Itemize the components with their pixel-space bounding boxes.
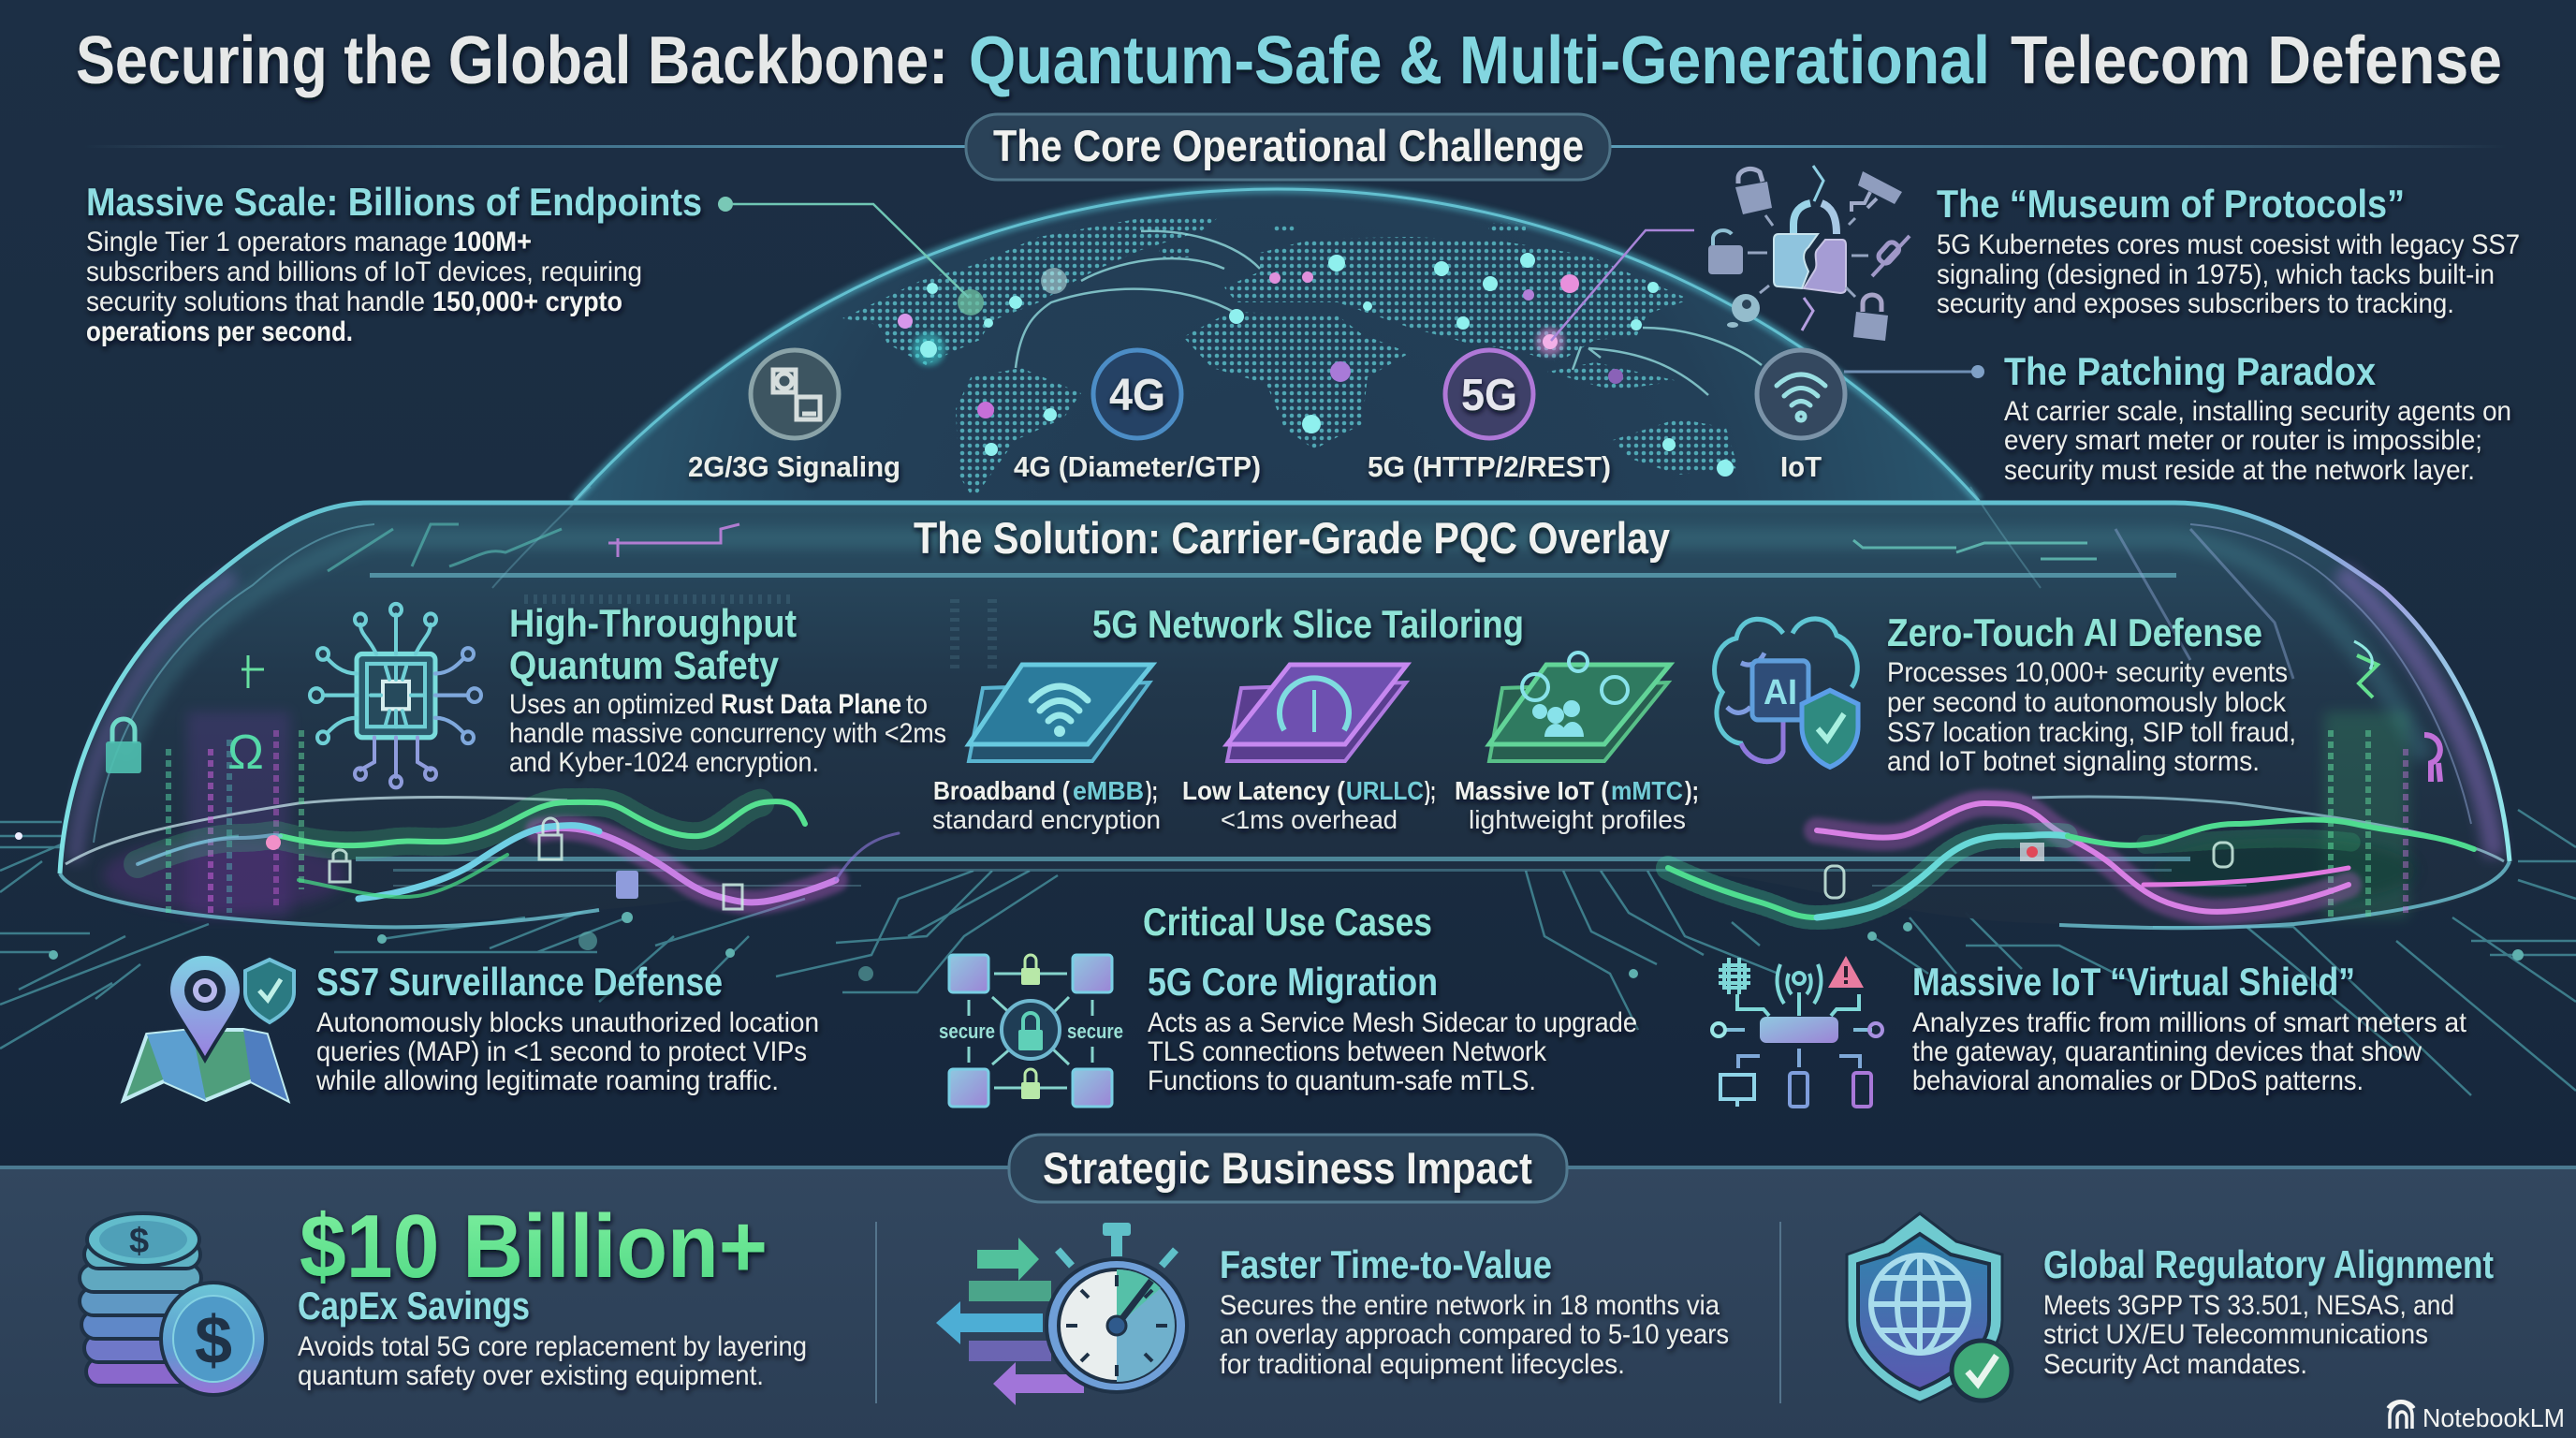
text: Massive Scale: operations per second. <box>86 316 353 347</box>
globe dome with dotted world map <box>562 186 1992 513</box>
slice labels: URLLC <box>1346 776 1424 805</box>
slice labels: <1ms overhead <box>1221 805 1398 834</box>
badge: 4G: 4G <box>1109 371 1165 420</box>
text: Faster Time-to-Value: for traditional equipment lifecycles. <box>1220 1349 1625 1380</box>
text: Massive Scale: Single Tier 1 operators manage <box>86 227 447 257</box>
icon: coin stack: $ <box>129 1222 149 1261</box>
slice labels: eMBB <box>1073 776 1144 805</box>
badge: 5G: 5G <box>1461 371 1517 420</box>
title: Telecom Defense <box>2011 23 2502 98</box>
slice labels: ); <box>1425 776 1436 805</box>
slice labels: mMTC <box>1611 776 1683 805</box>
text: Faster Time-to-Value: Secures the entire network in 18 months via <box>1220 1290 1720 1321</box>
text: Massive Scale: Massive Scale: Billions of Endpoints <box>86 180 702 224</box>
text: Massive IoT Virtual Shield <box>1912 960 2467 1096</box>
slice labels: lightweight profiles <box>1469 805 1686 834</box>
chain <box>1872 236 1910 276</box>
title <box>76 23 2502 98</box>
text: 5G Core Migration: Functions to quantum-safe mTLS. <box>1148 1065 1536 1096</box>
text: Museum of Protocols <box>1937 182 2520 319</box>
icon: AI brain with shield <box>1715 619 1858 767</box>
text: Zero-Touch AI Defense: per second to autonomously block <box>1887 687 2287 718</box>
slice labels: standard encryption <box>932 805 1161 834</box>
text: Global Regulatory Alignment: strict UX/EU Telecommunications <box>2043 1319 2428 1350</box>
glowing map nodes <box>898 253 1734 477</box>
text: The Patching Paradox: every smart meter or router is impossible; <box>2004 425 2482 456</box>
glass code streaks <box>168 730 2406 917</box>
camera <box>1858 171 1902 204</box>
text: Museum of Protocols: security and exposes subscribers to tracking. <box>1937 288 2454 319</box>
heading: 5G Network Slice Tailoring: 5G Network Slice Tailoring <box>1092 602 1524 646</box>
icon: broken locks cluster <box>1708 166 1910 341</box>
text: High-Throughput Quantum Safety: High-Throughput <box>509 601 797 645</box>
text: 5G Core Migration: 5G Core Migration <box>1148 960 1438 1004</box>
badge labels: 2G/3G Signaling <box>688 450 900 483</box>
badge: 5G <box>1445 350 1533 438</box>
text: Massive IoT Virtual Shield: Massive IoT “Virtual Shield” <box>1912 960 2355 1004</box>
badge labels: IoT <box>1780 450 1822 483</box>
small locks on wave <box>329 818 742 909</box>
text: The Patching Paradox: At carrier scale, installing security agents on <box>2004 396 2511 427</box>
glass decorative circuit marks <box>328 524 2293 679</box>
text: Museum of Protocols: The “Museum of Protocols” <box>1937 182 2405 226</box>
metric: $10 Billion+: Avoids total 5G core replacement by layering <box>298 1331 807 1362</box>
text: Zero-Touch AI Defense: Zero-Touch AI Defense <box>1887 610 2262 654</box>
title: Securing the Global Backbone: <box>76 23 948 98</box>
glass glyphs: lock and omega: Ω <box>227 726 264 780</box>
icon: stopwatch with arrows <box>936 1223 1187 1405</box>
circuit trace nodes <box>15 832 2524 981</box>
key <box>1732 294 1760 322</box>
text: High-Throughput Quantum Safety: Quantum Safety <box>509 643 780 687</box>
text: Faster Time-to-Value: an overlay approach compared to 5-10 years <box>1220 1319 1729 1350</box>
icon: coin stack: $ <box>195 1303 232 1378</box>
pill: Strategic Business Impact <box>1009 1135 1567 1202</box>
icon: AI brain with shield: AI <box>1764 672 1797 712</box>
metric: $10 Billion+: CapEx Savings <box>298 1284 530 1328</box>
text: High-Throughput Quantum Safety: Rust Data Plane <box>721 689 901 720</box>
callout: massive scale leader line <box>718 197 969 298</box>
glass glyphs: lock and omega <box>106 641 2440 782</box>
text: SS7 Surveillance Defense: queries (MAP) in <1 second to protect VIPs <box>316 1036 807 1067</box>
text: Massive Scale <box>86 180 702 347</box>
badge: 4G <box>1093 350 1181 438</box>
badge: IoT wifi <box>1757 350 1845 438</box>
text: High-Throughput Quantum Safety: to <box>906 689 928 720</box>
icon: IoT gateway <box>1712 956 1882 1107</box>
pill: Strategic Business Impact: Strategic Business Impact <box>1043 1143 1532 1193</box>
text: 5G Core Migration <box>1148 960 1637 1096</box>
text: Museum of Protocols: signaling (designed in 1975), which tacks built-in <box>1937 259 2495 290</box>
slice labels <box>932 776 1699 834</box>
badge labels <box>688 450 1822 483</box>
text: The Patching Paradox <box>2004 349 2511 486</box>
text: The Patching Paradox: The Patching Paradox <box>2004 349 2377 393</box>
icon: quantum chip <box>310 604 481 787</box>
pill: The Core Operational Challenge: The Core Operational Challenge <box>993 121 1584 170</box>
text: Faster Time-to-Value <box>1220 1242 1729 1380</box>
metric: $10 Billion+ <box>298 1196 807 1391</box>
text: SS7 Surveillance Defense: Autonomously blocks unauthorized location <box>316 1007 819 1038</box>
text: Global Regulatory Alignment: Meets 3GPP TS 33.501, NESAS, and <box>2043 1290 2454 1321</box>
network arcs <box>1016 231 1762 395</box>
circuit traces below the dome <box>0 810 2576 1095</box>
icon: service mesh: secure <box>939 1020 995 1043</box>
slice labels: ); <box>1146 776 1158 805</box>
pill: The Core Operational Challenge <box>966 114 1610 180</box>
text: SS7 Surveillance Defense: SS7 Surveillance Defense <box>316 960 723 1004</box>
quantum wave: left <box>138 801 899 909</box>
text: Massive Scale: subscribers and billions of IoT devices, requiring <box>86 257 642 287</box>
text: 5G Core Migration: TLS connections between Network <box>1148 1036 1547 1067</box>
text: Museum of Protocols: 5G Kubernetes cores must coesist with legacy SS7 <box>1937 229 2520 260</box>
small locks on wave <box>1825 843 2232 898</box>
text: High-Throughput Quantum Safety <box>509 601 946 778</box>
badge: 2G/3G <box>751 350 839 438</box>
badge labels: 5G (HTTP/2/REST) <box>1368 450 1611 483</box>
text: Faster Time-to-Value: Faster Time-to-Value <box>1220 1242 1552 1286</box>
heading: Critical Use Cases: Critical Use Cases <box>1143 900 1432 944</box>
text: High-Throughput Quantum Safety: and Kyber-1024 encryption. <box>509 747 819 778</box>
text: Zero-Touch AI Defense <box>1887 610 2296 777</box>
callout: patching paradox leader <box>1844 365 1984 378</box>
text: Zero-Touch AI Defense: Processes 10,000+ security events <box>1887 657 2288 688</box>
icon: low latency slice <box>1227 665 1407 761</box>
text: 5G Core Migration: Acts as a Service Mesh Sidecar to upgrade <box>1148 1007 1637 1038</box>
text: High-Throughput Quantum Safety: handle massive concurrency with <2ms <box>509 718 946 749</box>
slice labels: Massive IoT ( <box>1455 776 1610 805</box>
metric: $10 Billion+: $10 Billion+ <box>300 1196 768 1297</box>
callout: museum leader line <box>1551 230 1694 341</box>
title: Quantum-Safe & Multi-Generational <box>969 23 1990 98</box>
icon: map pin with shield <box>124 954 294 1100</box>
icon: service mesh <box>939 955 1123 1107</box>
heading: The Solution: The Solution: Carrier-Grade PQC Overlay <box>914 513 1670 563</box>
icon: globe shield with check <box>1847 1213 2012 1402</box>
text: SS7 Surveillance Defense <box>315 960 819 1096</box>
text: High-Throughput Quantum Safety: Uses an optimized <box>509 689 714 720</box>
text: Zero-Touch AI Defense: SS7 location tracking, SIP toll fraud, <box>1887 717 2296 748</box>
icon: massive IoT slice <box>1489 653 1670 761</box>
text: Massive IoT Virtual Shield: the gateway, quarantining devices that show <box>1912 1036 2422 1067</box>
glass outline <box>60 503 2510 873</box>
badge labels: 4G (Diameter/GTP) <box>1014 450 1261 483</box>
text: Global Regulatory Alignment: Security Act mandates. <box>2043 1349 2307 1380</box>
central padlock <box>1774 166 1846 330</box>
text: Global Regulatory Alignment: Global Regulatory Alignment <box>2043 1242 2494 1286</box>
icon: broadband slice <box>969 665 1152 761</box>
icon: coin stack <box>80 1213 266 1395</box>
glass dome: The Solution panel <box>60 487 2510 928</box>
glass side glow <box>75 538 2495 917</box>
icon: service mesh: secure <box>1067 1020 1123 1043</box>
protocol generation badges <box>688 350 1845 483</box>
world map dots <box>842 217 1738 499</box>
text: Global Regulatory Alignment <box>2043 1242 2494 1380</box>
slice labels: ); <box>1685 776 1699 805</box>
watermark: NotebookLM: NotebookLM <box>2422 1403 2565 1432</box>
text: Zero-Touch AI Defense: and IoT botnet signaling storms. <box>1887 746 2260 777</box>
text: Massive Scale: 150,000+ crypto <box>432 286 622 317</box>
small padlocks <box>1708 169 1888 341</box>
bottom impact band <box>0 1166 2576 1438</box>
slice labels: Low Latency ( <box>1182 776 1346 805</box>
text: Massive Scale: 100M+ <box>453 227 532 257</box>
text: Massive Scale: security solutions that handle <box>86 286 425 317</box>
quantum wave: right <box>1668 803 2474 917</box>
text: The Patching Paradox: security must reside at the network layer. <box>2004 455 2475 486</box>
text: Massive IoT Virtual Shield: behavioral anomalies or DDoS patterns. <box>1912 1065 2364 1096</box>
text: Massive IoT Virtual Shield: Analyzes traffic from millions of smart meters at <box>1912 1007 2467 1038</box>
text: SS7 Surveillance Defense: while allowing legitimate roaming traffic. <box>315 1065 779 1096</box>
metric: $10 Billion+: quantum safety over existing equipment. <box>298 1360 764 1391</box>
slice labels: Broadband ( <box>933 776 1071 805</box>
